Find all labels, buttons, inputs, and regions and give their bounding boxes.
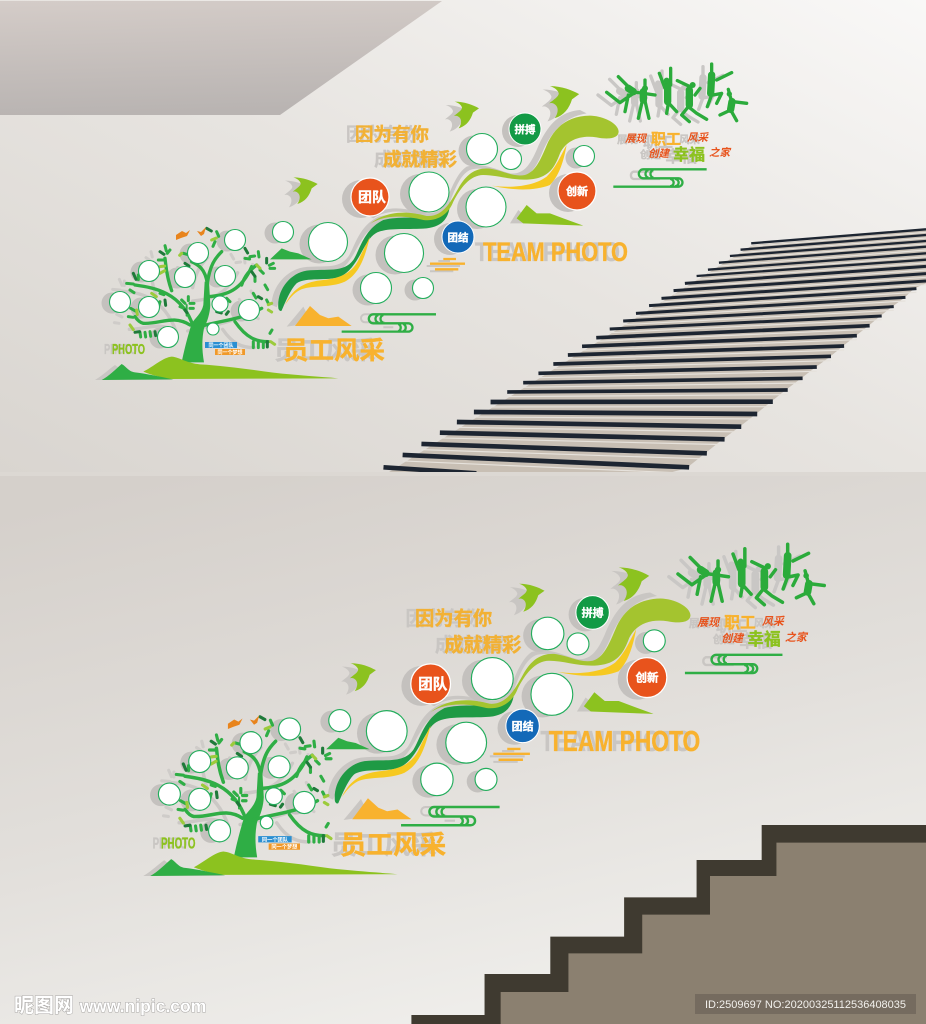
badge: unity bbox=[442, 221, 474, 253]
blue banner bbox=[205, 342, 237, 349]
tree photo frames bbox=[110, 230, 260, 348]
slogan: achieve brilliance: 成就精彩 bbox=[374, 149, 449, 170]
photo label: PHOTO bbox=[153, 836, 187, 853]
birds bbox=[341, 567, 649, 695]
slogan: build happy home: 幸福 bbox=[747, 630, 781, 649]
mountains and cloud lines bbox=[326, 692, 654, 825]
circle shadows bbox=[102, 115, 587, 348]
badge: striving: 拼搏 bbox=[514, 123, 536, 136]
cloud lines right bbox=[685, 655, 782, 673]
tree shadow bbox=[113, 252, 258, 348]
team photo title: TEAM PHOTO bbox=[549, 725, 700, 757]
blue banner: 同一个团队 bbox=[262, 835, 289, 843]
slogan: because of you: 因为有你 bbox=[355, 124, 429, 145]
badge: unity: 团结 bbox=[512, 719, 534, 733]
dancers shadow bbox=[598, 67, 723, 124]
ribbons bbox=[328, 592, 690, 803]
photo label: PHOTO bbox=[104, 341, 137, 358]
blue banner bbox=[258, 835, 292, 843]
tree bbox=[113, 228, 275, 362]
ground hills bbox=[95, 357, 338, 380]
badge: unity: 团结 bbox=[448, 231, 469, 244]
slogan: build happy home: 创建 bbox=[648, 148, 670, 160]
badge: team: 团队 bbox=[358, 189, 386, 205]
slogan: achieve brilliance: 成就精彩 bbox=[444, 633, 521, 656]
orange banner: 同一个梦想 bbox=[271, 843, 298, 851]
slogan: show staff style: 职工 bbox=[643, 134, 673, 151]
badge: innovation bbox=[627, 658, 667, 698]
dancers bbox=[598, 64, 747, 124]
slogan: build happy home: 之家 bbox=[709, 146, 731, 159]
slogan: build happy home: 创建 bbox=[713, 632, 735, 646]
lower wall background bbox=[0, 473, 926, 1024]
main photo frames bbox=[272, 134, 594, 304]
slogan: show staff style: 风采 bbox=[679, 133, 700, 146]
heading: staff style: 员工风采 bbox=[340, 830, 446, 860]
floor band bbox=[0, 472, 926, 476]
birds bbox=[284, 86, 579, 207]
upper wall background bbox=[0, 0, 926, 473]
team photo title: TEAM PHOTO bbox=[475, 237, 620, 267]
slogan: because of you: 因为有你 bbox=[346, 124, 420, 145]
icon: small orange birds bbox=[176, 227, 206, 240]
slogan: build happy home: 幸福 bbox=[739, 632, 772, 651]
photo label: PHOTO bbox=[161, 836, 196, 853]
slogan: show staff style bbox=[689, 615, 785, 635]
badge: innovation: 创新 bbox=[566, 184, 588, 198]
badge: striving: 拼搏 bbox=[582, 606, 604, 620]
badge: innovation: 创新 bbox=[635, 671, 659, 685]
slogan: build happy home bbox=[640, 146, 731, 166]
slogan: show staff style: 风采 bbox=[687, 132, 709, 144]
dancers bbox=[669, 544, 824, 608]
cloud lines right bbox=[613, 169, 707, 187]
slogan: show staff style: 展现 bbox=[689, 617, 711, 630]
photo label: PHOTO bbox=[112, 341, 145, 358]
slogan: show staff style: 职工 bbox=[724, 615, 756, 632]
slogan: build happy home: 幸福 bbox=[673, 146, 705, 164]
circle shadows bbox=[150, 598, 657, 843]
slogan: show staff style: 展现 bbox=[697, 617, 721, 629]
slogan: show staff style: 展现 bbox=[625, 133, 647, 145]
blue banner: 同一个团队 bbox=[208, 342, 234, 349]
slogan: show staff style: 职工 bbox=[716, 618, 748, 635]
slogan: achieve brilliance: 成就精彩 bbox=[435, 633, 512, 656]
heading: staff style: 员工风采 bbox=[283, 337, 385, 365]
slogan: build happy home bbox=[713, 630, 809, 651]
badge: innovation bbox=[558, 172, 596, 210]
orange banner bbox=[269, 843, 300, 851]
slogan: show staff style: 风采 bbox=[754, 616, 775, 630]
badge: unity bbox=[506, 709, 539, 743]
ground hills bbox=[143, 851, 398, 876]
badge: team bbox=[411, 664, 451, 704]
lower mural bbox=[143, 544, 824, 876]
ribbons bbox=[272, 110, 619, 311]
slogan: because of you: 因为有你 bbox=[406, 608, 483, 630]
orange banner: 同一个梦想 bbox=[217, 349, 243, 356]
watermark: image id bbox=[695, 994, 916, 1014]
slogan: build happy home: 创建 bbox=[721, 632, 745, 645]
badge: striving bbox=[576, 596, 609, 629]
tree bbox=[162, 717, 331, 857]
mountains and cloud lines bbox=[270, 205, 583, 332]
tree shadow bbox=[162, 741, 314, 842]
slogan: show staff style bbox=[617, 131, 709, 151]
slogan: show staff style: 展现 bbox=[617, 134, 638, 146]
team photo title: TEAM PHOTO bbox=[540, 725, 692, 757]
badge: striving bbox=[509, 113, 541, 145]
slogan: build happy home: 之家 bbox=[785, 631, 809, 644]
heading: staff style: 员工风采 bbox=[274, 337, 376, 365]
badge: team bbox=[351, 178, 389, 216]
main photo frames bbox=[329, 617, 665, 796]
icon: small orange birds bbox=[228, 715, 259, 729]
team photo title: TEAM PHOTO bbox=[483, 237, 628, 267]
upper mural bbox=[95, 64, 747, 380]
slogan: achieve brilliance: 成就精彩 bbox=[383, 149, 458, 170]
badge: team: 团队 bbox=[418, 675, 448, 693]
heading: staff style: 员工风采 bbox=[330, 830, 437, 860]
upper staircase bbox=[383, 229, 926, 473]
slogan: because of you: 因为有你 bbox=[415, 608, 492, 630]
watermark: image id: ID:2509697 NO:20200325112536408035 bbox=[705, 999, 906, 1011]
slogan: show staff style: 职工 bbox=[651, 131, 681, 148]
tree photo frames bbox=[158, 718, 315, 842]
slogan: show staff style: 风采 bbox=[762, 615, 785, 628]
watermark: nipic logo: 昵图网 www.nipic.com bbox=[14, 995, 206, 1017]
lower staircase bbox=[411, 825, 926, 1024]
slogan: build happy home: 创建 bbox=[640, 148, 661, 161]
ceiling soffit bbox=[0, 1, 442, 115]
slogan: build happy home: 幸福 bbox=[665, 148, 697, 166]
dancers shadow bbox=[669, 547, 800, 608]
